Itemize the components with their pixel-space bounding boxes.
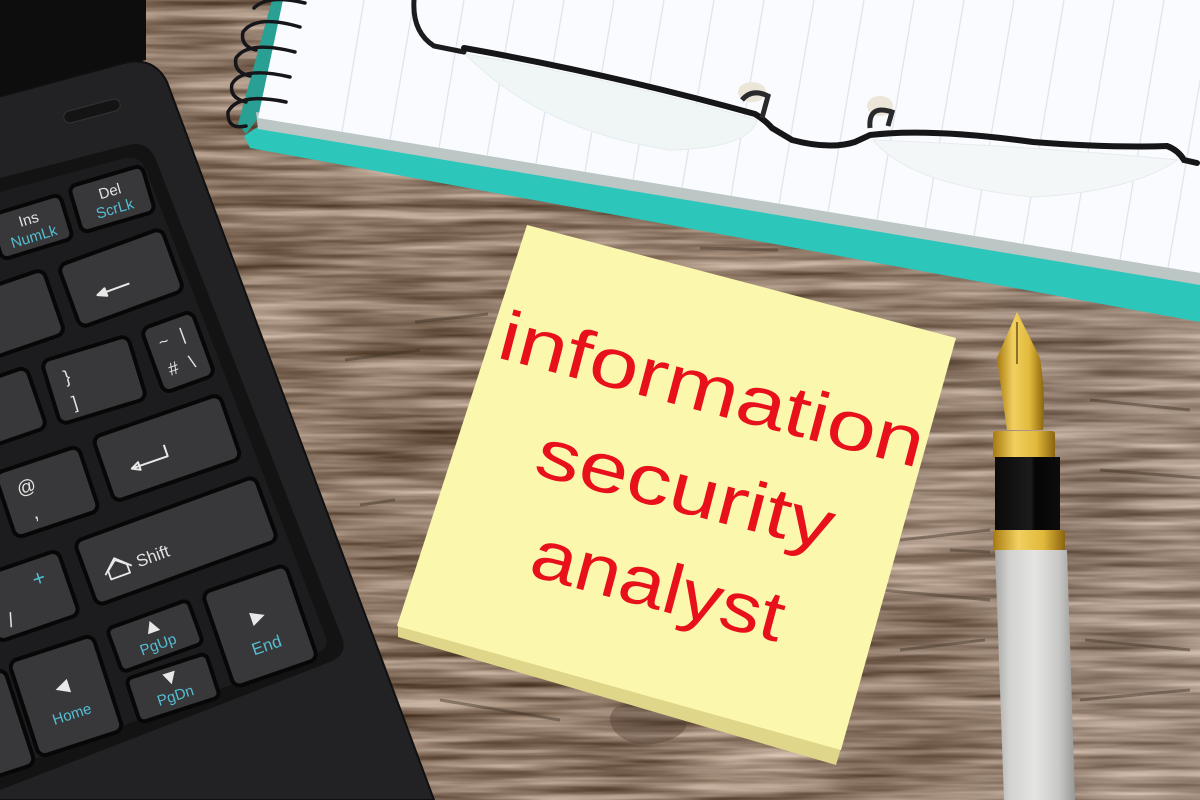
key: End	[202, 564, 318, 688]
black grip	[995, 457, 1060, 533]
gold band	[993, 530, 1065, 551]
key: tilde hash	[141, 311, 215, 393]
key: partial bottom left	[0, 669, 35, 791]
laptop	[0, 0, 434, 800]
gold collar	[993, 431, 1055, 459]
key: at comma: @	[14, 475, 39, 501]
laptop hinge dark area	[0, 0, 146, 98]
handwritten text	[491, 296, 934, 657]
text: analyst: analyst	[523, 514, 793, 657]
key: Ins NumLk: NumLk	[9, 222, 60, 252]
key: at comma: ,	[29, 502, 41, 524]
nib slit	[1016, 322, 1018, 364]
eyeglasses	[414, 0, 1197, 197]
key: brace: ]	[69, 392, 80, 413]
key: enter	[93, 394, 241, 502]
notebook teal spine	[238, 0, 284, 134]
left lens	[465, 54, 757, 150]
right lens	[873, 140, 1178, 197]
notebook page	[258, 0, 1200, 273]
key: Ins NumLk	[0, 194, 73, 260]
key: Home	[9, 635, 123, 757]
key: PgUp: PgUp	[138, 631, 179, 659]
left temple arm	[414, 0, 464, 52]
keyboard well lip	[0, 144, 344, 790]
key: Shift	[74, 476, 278, 606]
key: plus slash: +	[29, 564, 49, 592]
key: plus slash: /	[5, 609, 18, 632]
text: information: information	[491, 296, 934, 482]
glasses frame	[464, 48, 1197, 163]
note face	[397, 225, 956, 750]
key: plus slash	[0, 550, 80, 642]
notebook	[228, 0, 1200, 322]
key: tilde hash: ~	[156, 331, 172, 352]
keyboard deck	[0, 158, 326, 772]
key: tilde hash: |	[177, 324, 188, 345]
key: tilde hash: #	[165, 357, 182, 380]
spiral binding	[228, 0, 305, 127]
key: End: End	[249, 631, 284, 659]
keys	[0, 165, 318, 791]
key: Del ScrLk: ScrLk	[94, 195, 136, 223]
key: Ins NumLk: Ins	[17, 209, 41, 231]
key: left arrow	[58, 228, 184, 328]
speaker slot	[62, 98, 122, 124]
sticky note	[397, 225, 956, 765]
nose pads	[738, 82, 766, 102]
laptop body	[0, 61, 434, 800]
notebook teal cover	[244, 126, 1200, 322]
key: tilde hash: \	[186, 351, 198, 372]
key: Del ScrLk	[69, 165, 155, 233]
notebook page edge	[256, 112, 1200, 285]
key: brace: }	[61, 366, 73, 387]
text: security: security	[528, 413, 843, 565]
fountain pen	[993, 312, 1075, 800]
page ruled lines	[342, 0, 1200, 268]
key: Home: Home	[50, 700, 94, 729]
key: PgUp	[107, 600, 203, 672]
key: Shift: Shift	[134, 542, 172, 571]
key: PgDn: PgDn	[155, 682, 196, 710]
note pad thickness	[398, 626, 841, 765]
key: partial upper left	[0, 269, 65, 369]
pen nib	[997, 312, 1044, 430]
key: brace	[41, 335, 147, 425]
key: at comma	[0, 446, 100, 538]
key: PgDn	[126, 653, 220, 723]
silver barrel	[995, 550, 1075, 800]
key: Del ScrLk: Del	[97, 180, 123, 203]
key: partial middle left	[0, 367, 47, 457]
